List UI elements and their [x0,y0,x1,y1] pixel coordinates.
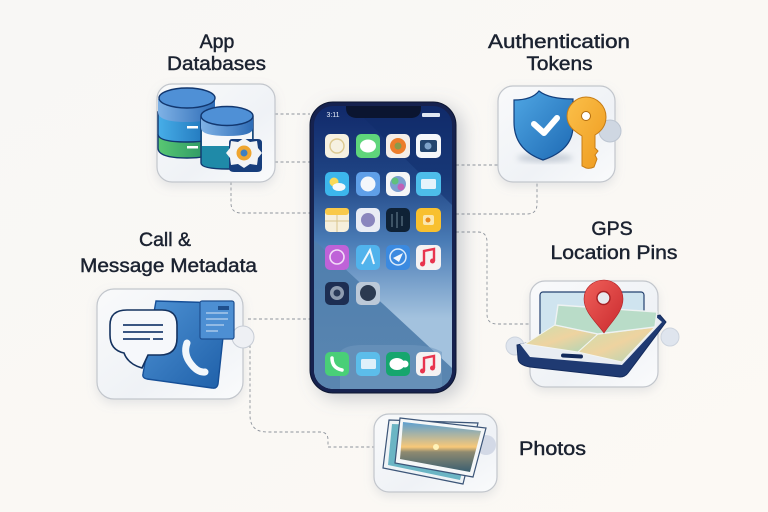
icon: dock apps [325,352,441,376]
title: Authentication Tokens: Tokens [526,53,593,75]
phone screen [314,106,452,389]
icon: connector bubble [599,120,621,142]
icon: metadata card [200,301,234,339]
panel: authentication tokens [498,86,621,182]
connector lines [231,114,537,447]
icon: large database [158,88,215,158]
title: Call & Message Metadata: Call & [139,229,191,251]
icon: side bubbles [506,328,679,355]
icon: row 5 apps [325,282,380,305]
icon: map pin [584,280,623,333]
speech lines [123,325,163,339]
icon: blue phone document [143,301,226,388]
icon: row 3 apps [325,208,441,232]
shield shadow [517,154,573,162]
icon: front photo [395,418,486,477]
title: Authentication Tokens: Authentication [488,31,630,53]
icon: back screen [540,292,644,338]
phone body [310,102,456,393]
icon: handset [186,343,205,372]
icon: check mark [534,118,557,133]
title: App Databases: Databases [167,53,266,75]
icon: folded map [525,305,657,362]
app icons [325,134,441,376]
panel: photos [374,414,497,492]
icon: connector bubble [476,435,496,455]
panel: call and message metadata [97,289,254,399]
title: GPS Location Pins: GPS [591,218,633,240]
icon: gear badge [226,138,262,172]
icon: row 4 apps [325,245,441,270]
icon: row 1 apps [325,134,441,158]
icon: tablet base [517,315,666,377]
panel: GPS location pins [506,280,679,387]
icon: key [567,97,606,168]
title: Photos: Photos [519,438,586,460]
icon: speech bubble [110,310,177,368]
icon: back photo [383,420,478,484]
icon: connector bubble [232,326,254,348]
icon: row 2 apps [325,172,441,196]
title: Call & Message Metadata: Message Metadata [80,255,257,277]
title: App Databases: App [200,31,234,53]
phone [310,102,456,393]
icon: small database [201,106,253,169]
icon: shield [514,91,573,160]
title: GPS Location Pins: Location Pins [550,242,678,264]
status bar: 3:11 [326,112,340,119]
panel: app databases [157,84,275,182]
notch [346,106,421,118]
